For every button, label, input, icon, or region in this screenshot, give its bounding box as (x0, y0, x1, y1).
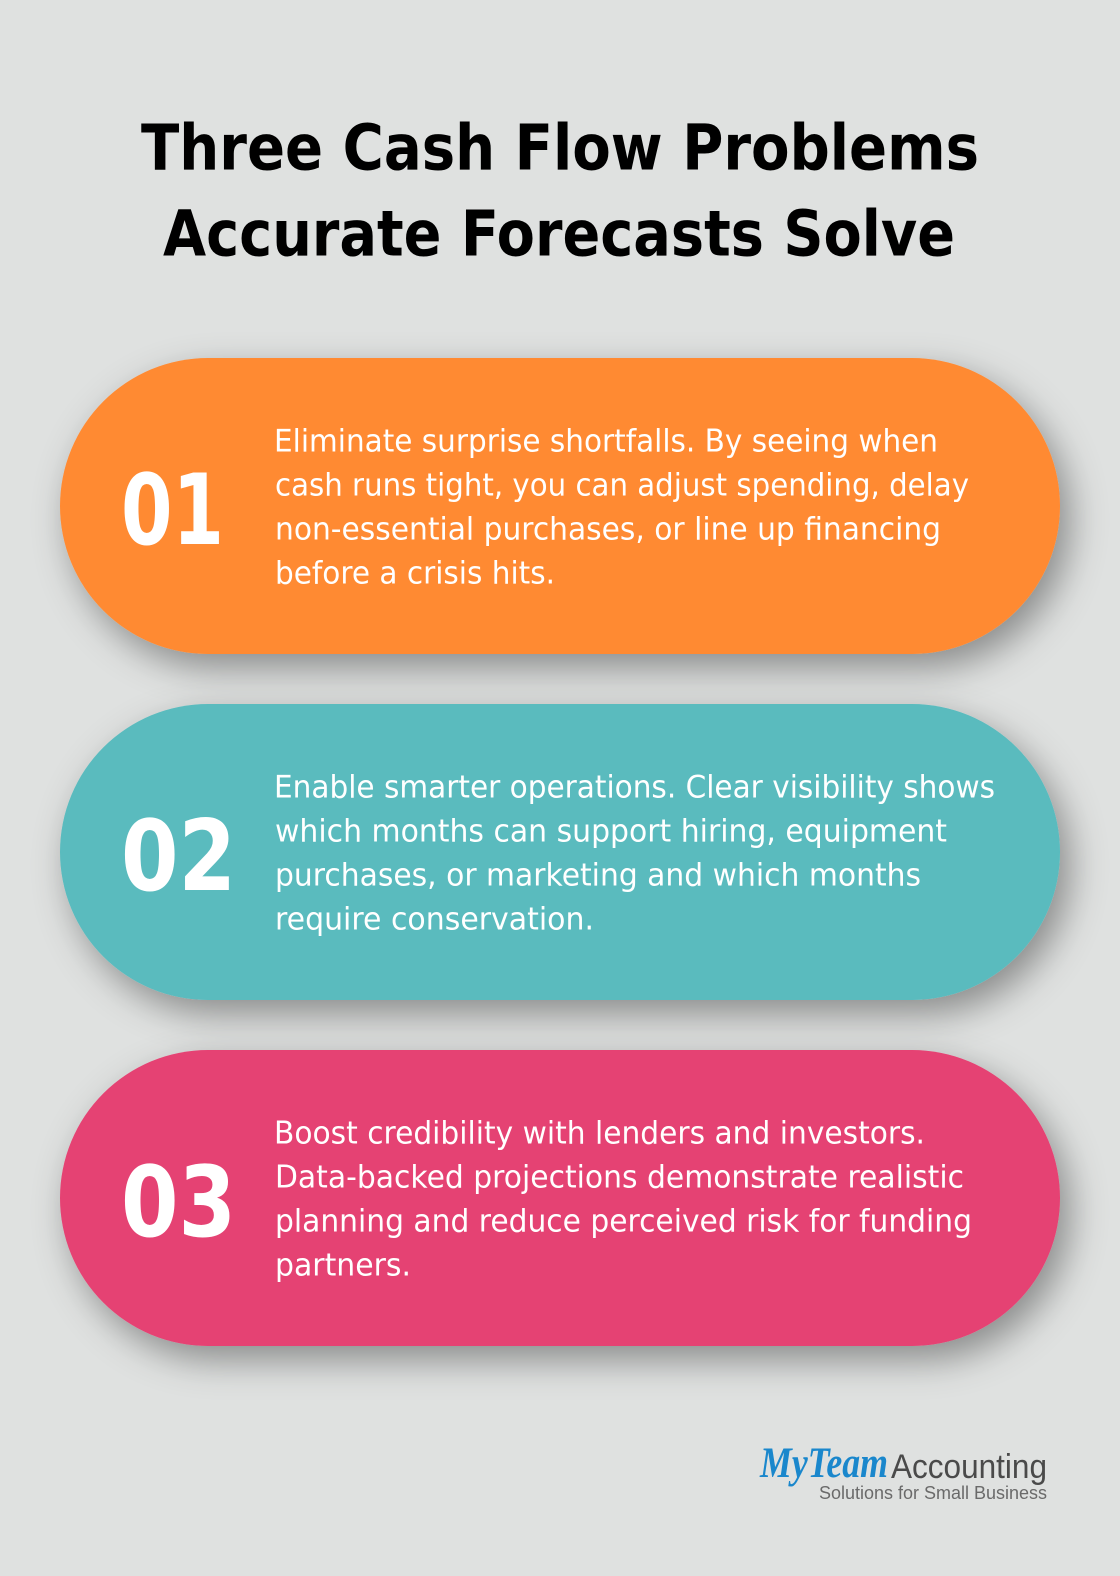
number 02: 02 (121, 800, 236, 914)
text block 03: Data-backed projections demonstrate realistic (275, 1160, 964, 1196)
panel: 03 boost credibility (60, 1050, 1060, 1346)
text block 01: non-essential purchases, or line up financing (275, 512, 941, 548)
title: Three Cash Flow Problems (141, 112, 979, 184)
text block 02: purchases, or marketing and which months (275, 858, 921, 894)
text block 01: Eliminate surprise shortfalls. By seeing when (274, 424, 938, 460)
logo: MyTeam Accounting: Accounting (891, 1448, 1047, 1486)
logo: MyTeam Accounting (759, 1440, 1047, 1503)
panel: 01 eliminate surprise shortfalls (60, 358, 1060, 654)
text block 03 (274, 1116, 972, 1284)
logo: MyTeam Accounting: Solutions for Small Business (819, 1483, 1047, 1503)
number 03: 03 (121, 1146, 236, 1260)
title: Accurate Forecasts Solve (163, 198, 955, 270)
logo: MyTeam Accounting: MyTeam (759, 1440, 888, 1487)
panel: 02 enable smarter operations (60, 704, 1060, 1000)
text block 01: before a crisis hits. (275, 556, 555, 592)
text block 01: cash runs tight, you can adjust spending, delay (275, 468, 969, 504)
text block 03: planning and reduce perceived risk for funding (275, 1204, 972, 1240)
text block 03: partners. (275, 1248, 411, 1284)
text block 01 (274, 424, 969, 592)
text block 03: Boost credibility with lenders and investors. (274, 1116, 925, 1152)
text block 02: which months can support hiring, equipment (275, 814, 947, 850)
text block 02 (274, 770, 995, 938)
title (141, 112, 979, 270)
number 01: 01 (121, 454, 224, 568)
text block 02: require conservation. (275, 902, 594, 938)
text block 02: Enable smarter operations. Clear visibility shows (274, 770, 995, 806)
